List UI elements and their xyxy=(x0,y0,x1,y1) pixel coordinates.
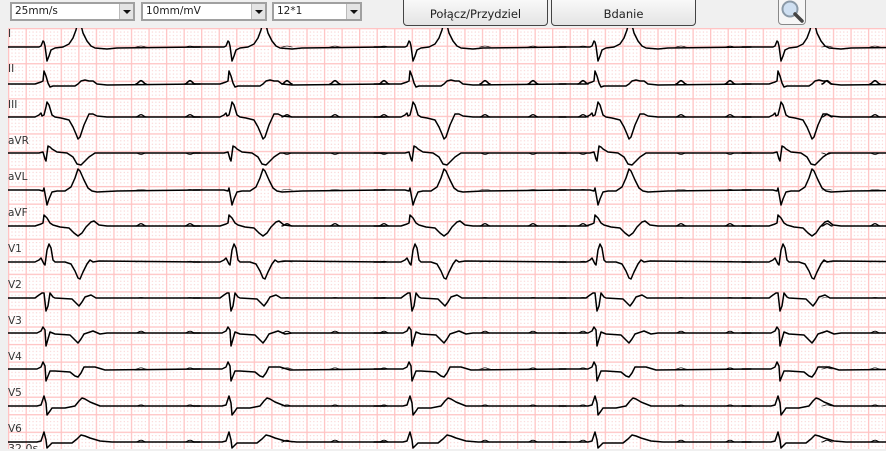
trace: lead V5 xyxy=(8,396,886,415)
lead labels: II xyxy=(8,63,14,75)
lead labels: aVL xyxy=(8,171,28,183)
lead labels xyxy=(8,28,29,435)
trace: lead aVL xyxy=(8,169,886,205)
trace: lead V1 xyxy=(8,244,886,279)
icon: magnifier button xyxy=(778,0,806,25)
trace: lead V4 xyxy=(8,362,886,381)
combo box: speed xyxy=(10,2,135,21)
trace: lead V2 xyxy=(8,293,886,311)
combo box: gain xyxy=(141,2,267,21)
trace: lead aVF xyxy=(8,215,886,236)
lead labels: V2 xyxy=(8,279,22,291)
lead labels: III xyxy=(8,99,17,111)
button: connect xyxy=(403,0,548,26)
lead labels: V4 xyxy=(8,351,22,363)
trace: lead V3 xyxy=(8,327,886,346)
lead labels: V1 xyxy=(8,243,22,255)
lead labels: I xyxy=(8,28,11,40)
combo box: layout: 12*1 xyxy=(277,5,302,17)
button: connect: Połącz/Przydziel xyxy=(430,7,521,21)
combo box: speed: 25mm/s xyxy=(15,5,58,17)
combo box: layout xyxy=(272,2,362,21)
lead labels: aVR xyxy=(8,135,29,147)
button: examination: Bdanie xyxy=(604,7,643,21)
lead labels: V5 xyxy=(8,387,22,399)
button: examination xyxy=(551,0,696,26)
trace: lead aVR xyxy=(8,146,886,165)
trace: lead III xyxy=(8,102,886,139)
trace: lead I xyxy=(8,28,886,62)
combo box: gain: 10mm/mV xyxy=(146,5,201,17)
lead labels: V3 xyxy=(8,315,22,327)
trace: lead V6 xyxy=(8,432,886,448)
lead labels: V6 xyxy=(8,423,22,435)
lead labels: aVF xyxy=(8,207,28,219)
trace: lead II xyxy=(8,71,886,87)
